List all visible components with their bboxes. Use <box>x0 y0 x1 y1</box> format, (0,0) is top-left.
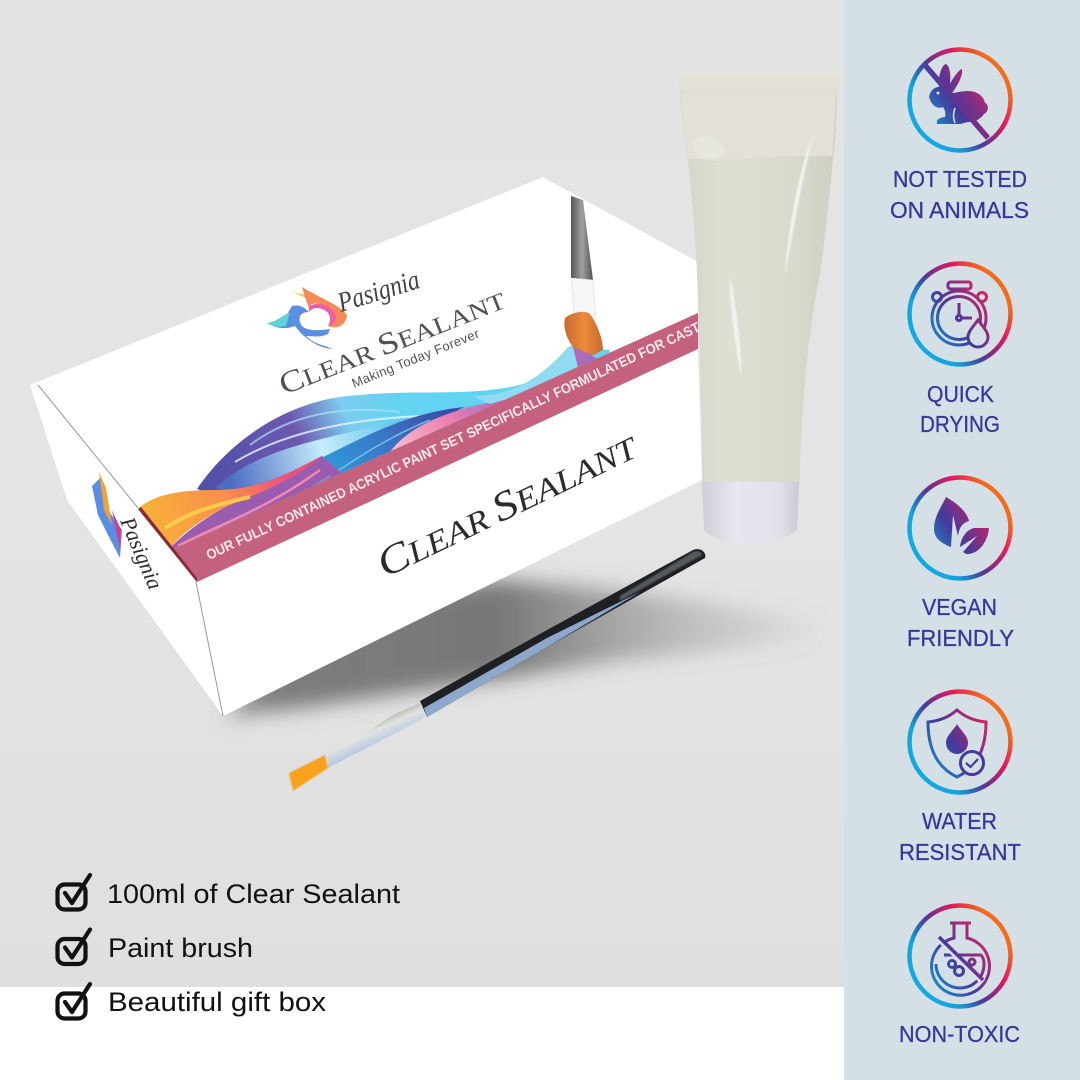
icon: crossed-out rabbit <box>910 50 1010 150</box>
tube body <box>680 92 837 482</box>
tube crimp <box>678 73 842 94</box>
brush handle <box>420 549 705 717</box>
background panel <box>0 0 844 987</box>
tube upper translucent section <box>681 94 836 161</box>
tube highlights <box>730 133 814 377</box>
box side flap <box>30 385 223 716</box>
label: FRIENDLY <box>907 625 1014 651</box>
product box <box>30 177 723 716</box>
loose paint brush <box>289 549 705 791</box>
brush handle tip highlight <box>620 551 702 601</box>
checklist <box>58 875 401 1018</box>
brush ferrule <box>327 703 425 768</box>
side flap logo <box>92 472 122 558</box>
icon: leaves <box>910 478 1010 578</box>
side flap brand name: Pasignia <box>115 512 168 593</box>
paint brush artwork on box <box>564 196 603 368</box>
brush bristles <box>289 755 328 791</box>
label: DRYING <box>920 411 1000 437</box>
label: WATER <box>922 808 997 834</box>
item label: Beautiful gift box <box>108 987 327 1017</box>
box tagline: Making Today Forever <box>350 326 482 391</box>
check item: 100ml <box>58 875 401 910</box>
icon: checkbox <box>58 875 90 910</box>
pink ribbon <box>138 313 698 582</box>
ribbon text: OUR FULLY CONTAINED ACRYLIC PAINT SET SPECIFICALLY FORMULATED FOR CASTING <box>204 309 723 563</box>
brand name: Pasignia <box>333 264 423 319</box>
claim: non-toxic <box>899 906 1020 1047</box>
icon: checkbox <box>58 930 90 964</box>
claim: quick drying <box>910 264 1010 437</box>
check item: brush <box>58 930 253 964</box>
brand logo mark <box>267 287 347 349</box>
label: RESISTANT <box>899 839 1021 865</box>
icon: stopwatch with drop <box>910 264 1010 364</box>
brush handle reflection <box>424 592 640 717</box>
tube air bubble <box>692 136 724 158</box>
ribbon fold edge <box>138 507 197 582</box>
claim: vegan friendly <box>907 478 1014 651</box>
tube cap <box>702 482 799 544</box>
label: ON ANIMALS <box>890 197 1029 223</box>
box front face <box>196 349 702 716</box>
claim: not tested on animals <box>890 50 1029 223</box>
label: VEGAN <box>922 594 997 620</box>
claim: water resistant <box>899 692 1021 865</box>
label: NOT TESTED <box>893 166 1027 192</box>
icon: crossed-out flask <box>910 906 1010 1006</box>
check item: gift box <box>58 984 327 1018</box>
label: QUICK <box>927 381 995 407</box>
box front title: CLEAR SEALANT <box>369 421 646 586</box>
icon: checkbox <box>58 984 90 1018</box>
box title: CLEAR SEALANT <box>274 281 510 402</box>
paint swirl artwork <box>138 346 610 556</box>
item label: 100ml of Clear Sealant <box>107 879 401 909</box>
icon: shield with drop and check <box>910 692 1010 792</box>
box edges <box>38 385 223 716</box>
box shadow <box>225 580 820 716</box>
label: NON-TOXIC <box>899 1021 1020 1047</box>
sealant tube <box>678 73 842 544</box>
box top face <box>30 177 698 549</box>
panel: side claims <box>844 0 1080 1080</box>
item label: Paint brush <box>108 933 253 963</box>
